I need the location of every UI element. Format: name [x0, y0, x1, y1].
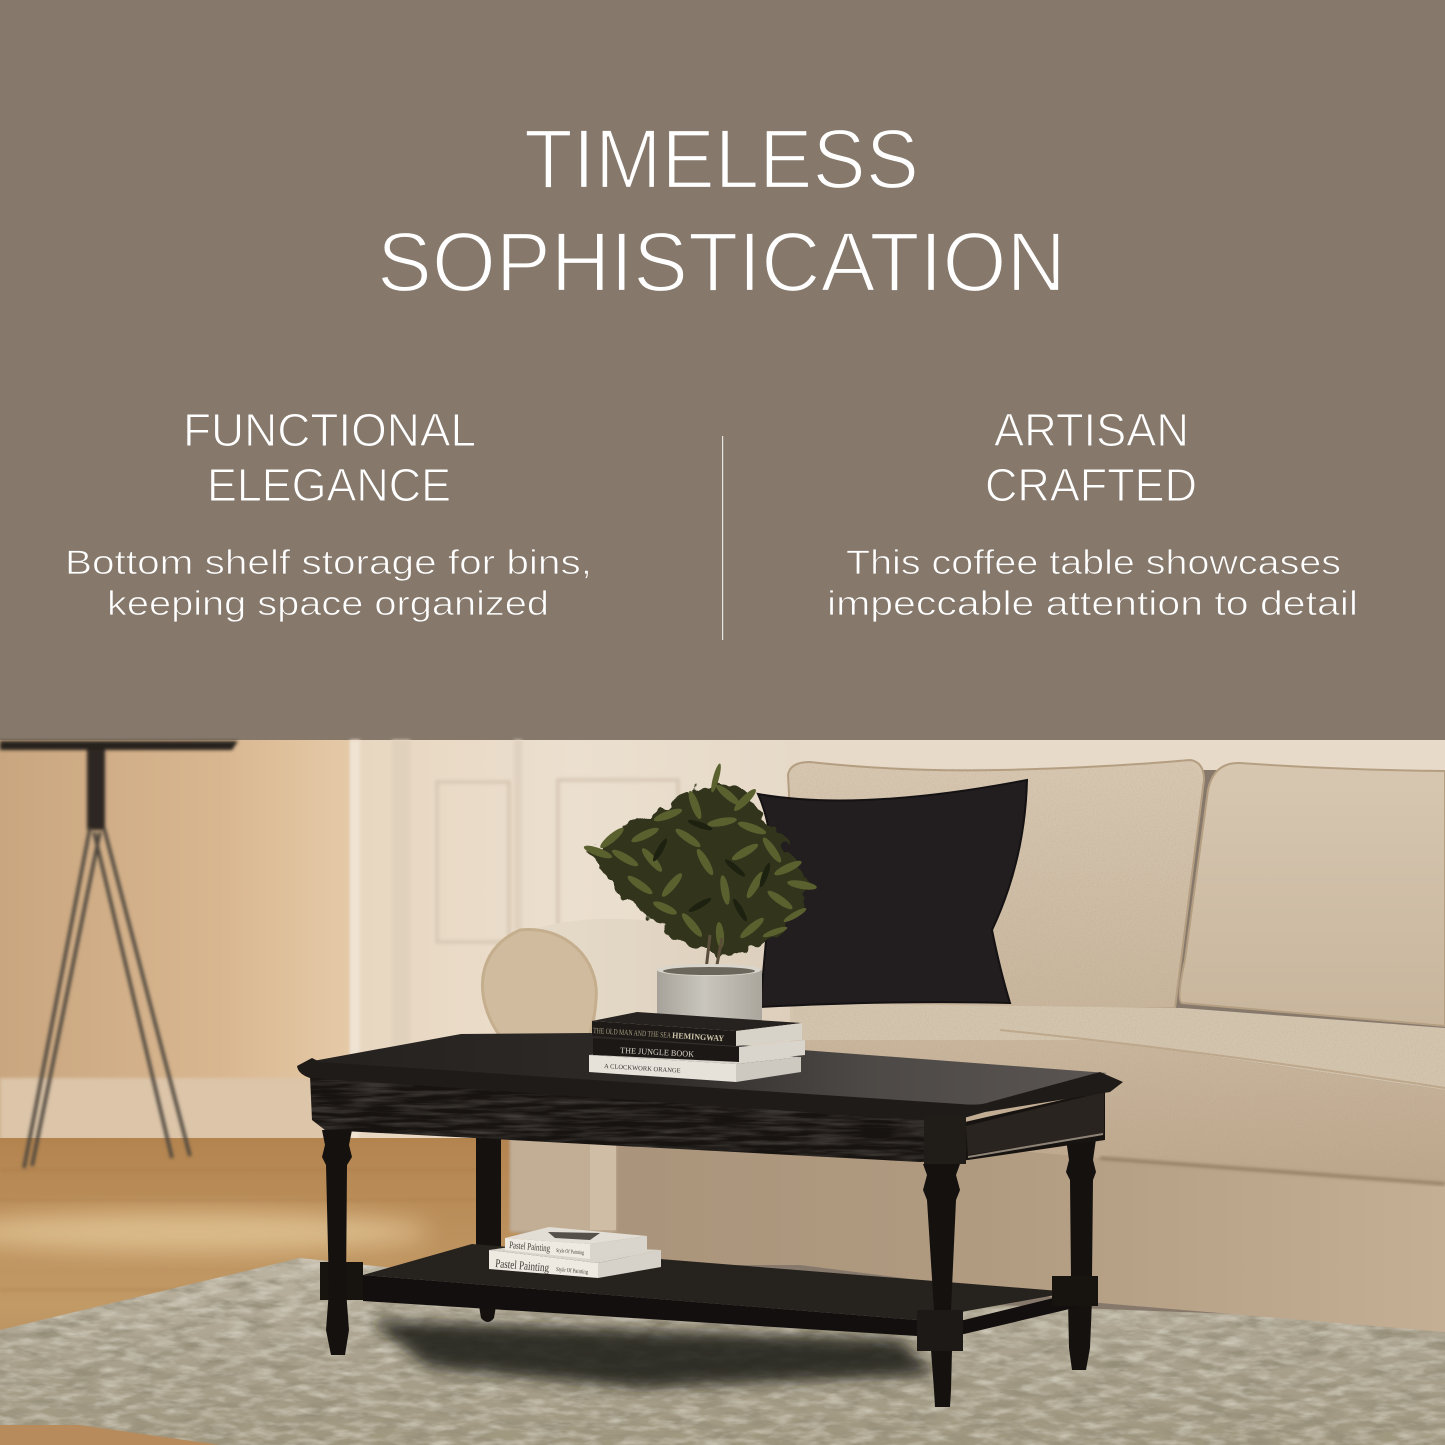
heading: functional elegance [183, 404, 476, 511]
middle black book [593, 1038, 805, 1062]
top black book: THE OLD MAN AND THE SEA [593, 1026, 671, 1040]
upper book: Pastel Painting [509, 1240, 551, 1255]
heading: functional elegance: ELEGANCE [207, 459, 451, 511]
text block: craft description [827, 544, 1358, 623]
title: TIMELESS [524, 112, 919, 206]
right leg block [917, 1310, 963, 1351]
table top surface [313, 1033, 1107, 1106]
sofa back cushion left [788, 760, 1204, 1010]
sofa seat front [780, 1040, 1445, 1184]
top panel background [0, 0, 1445, 740]
upper book: Style Of Painting [556, 1247, 585, 1256]
heading: artisan crafted: ARTISAN [994, 404, 1189, 456]
bottom white book: A CLOCKWORK ORANGE [604, 1063, 681, 1075]
panel: functional elegance [65, 404, 592, 623]
top black book: HEMINGWAY [672, 1030, 724, 1043]
wood floor [0, 1138, 530, 1445]
sofa skirt [510, 1140, 1445, 1332]
black pillow [758, 780, 1027, 1007]
sofa front panel [510, 1040, 616, 1232]
upper book [505, 1227, 647, 1259]
sofa arm [500, 919, 790, 1140]
coffee table [297, 1033, 1123, 1407]
room background wall and moulding [0, 740, 1445, 1160]
plant foliage mass [583, 763, 817, 955]
books on lower shelf [489, 1227, 661, 1278]
heading: functional elegance: FUNCTIONAL [183, 404, 476, 456]
title [377, 112, 1066, 309]
lower book: Pastel Painting [495, 1256, 550, 1275]
front left leg [322, 1130, 352, 1355]
photo: living room scene [0, 740, 1445, 1445]
heading: artisan crafted [985, 404, 1197, 511]
text block: storage description [65, 544, 592, 623]
sofa arm front roundel [482, 930, 596, 1040]
table apron [310, 1076, 1105, 1162]
bottom white book [589, 1050, 801, 1082]
middle black book: THE JUNGLE BOOK [620, 1045, 695, 1059]
title: SOPHISTICATION [377, 215, 1066, 309]
sofa [482, 760, 1445, 1332]
text block: craft description: This coffee table showcases [846, 544, 1341, 582]
lower book: Style Of Painting [556, 1266, 588, 1276]
front right leg foot [931, 1350, 952, 1407]
rear legs [476, 1130, 1096, 1370]
panel: artisan crafted [827, 404, 1358, 623]
heading: artisan crafted: CRAFTED [985, 459, 1197, 511]
text block: storage description: Bottom shelf storage for bins, [65, 544, 592, 582]
divider line [722, 436, 723, 640]
front right leg [923, 1164, 960, 1310]
books on table top [589, 1012, 805, 1082]
corner block [924, 1116, 966, 1164]
lower shelf [320, 1244, 1098, 1336]
sofa seat top [780, 1003, 1445, 1090]
lower book [489, 1244, 661, 1278]
top black book [592, 1012, 802, 1046]
plant stem [706, 935, 722, 970]
text block: craft description: impeccable attention to detail [827, 585, 1358, 623]
concrete pot [657, 964, 762, 1024]
floor lamp [0, 741, 238, 1168]
sofa back cushion right [1180, 763, 1445, 1026]
rug [0, 1258, 1445, 1445]
text block: storage description: keeping space organized [107, 585, 549, 623]
table top edge [297, 1058, 1123, 1122]
plant [583, 763, 817, 1024]
